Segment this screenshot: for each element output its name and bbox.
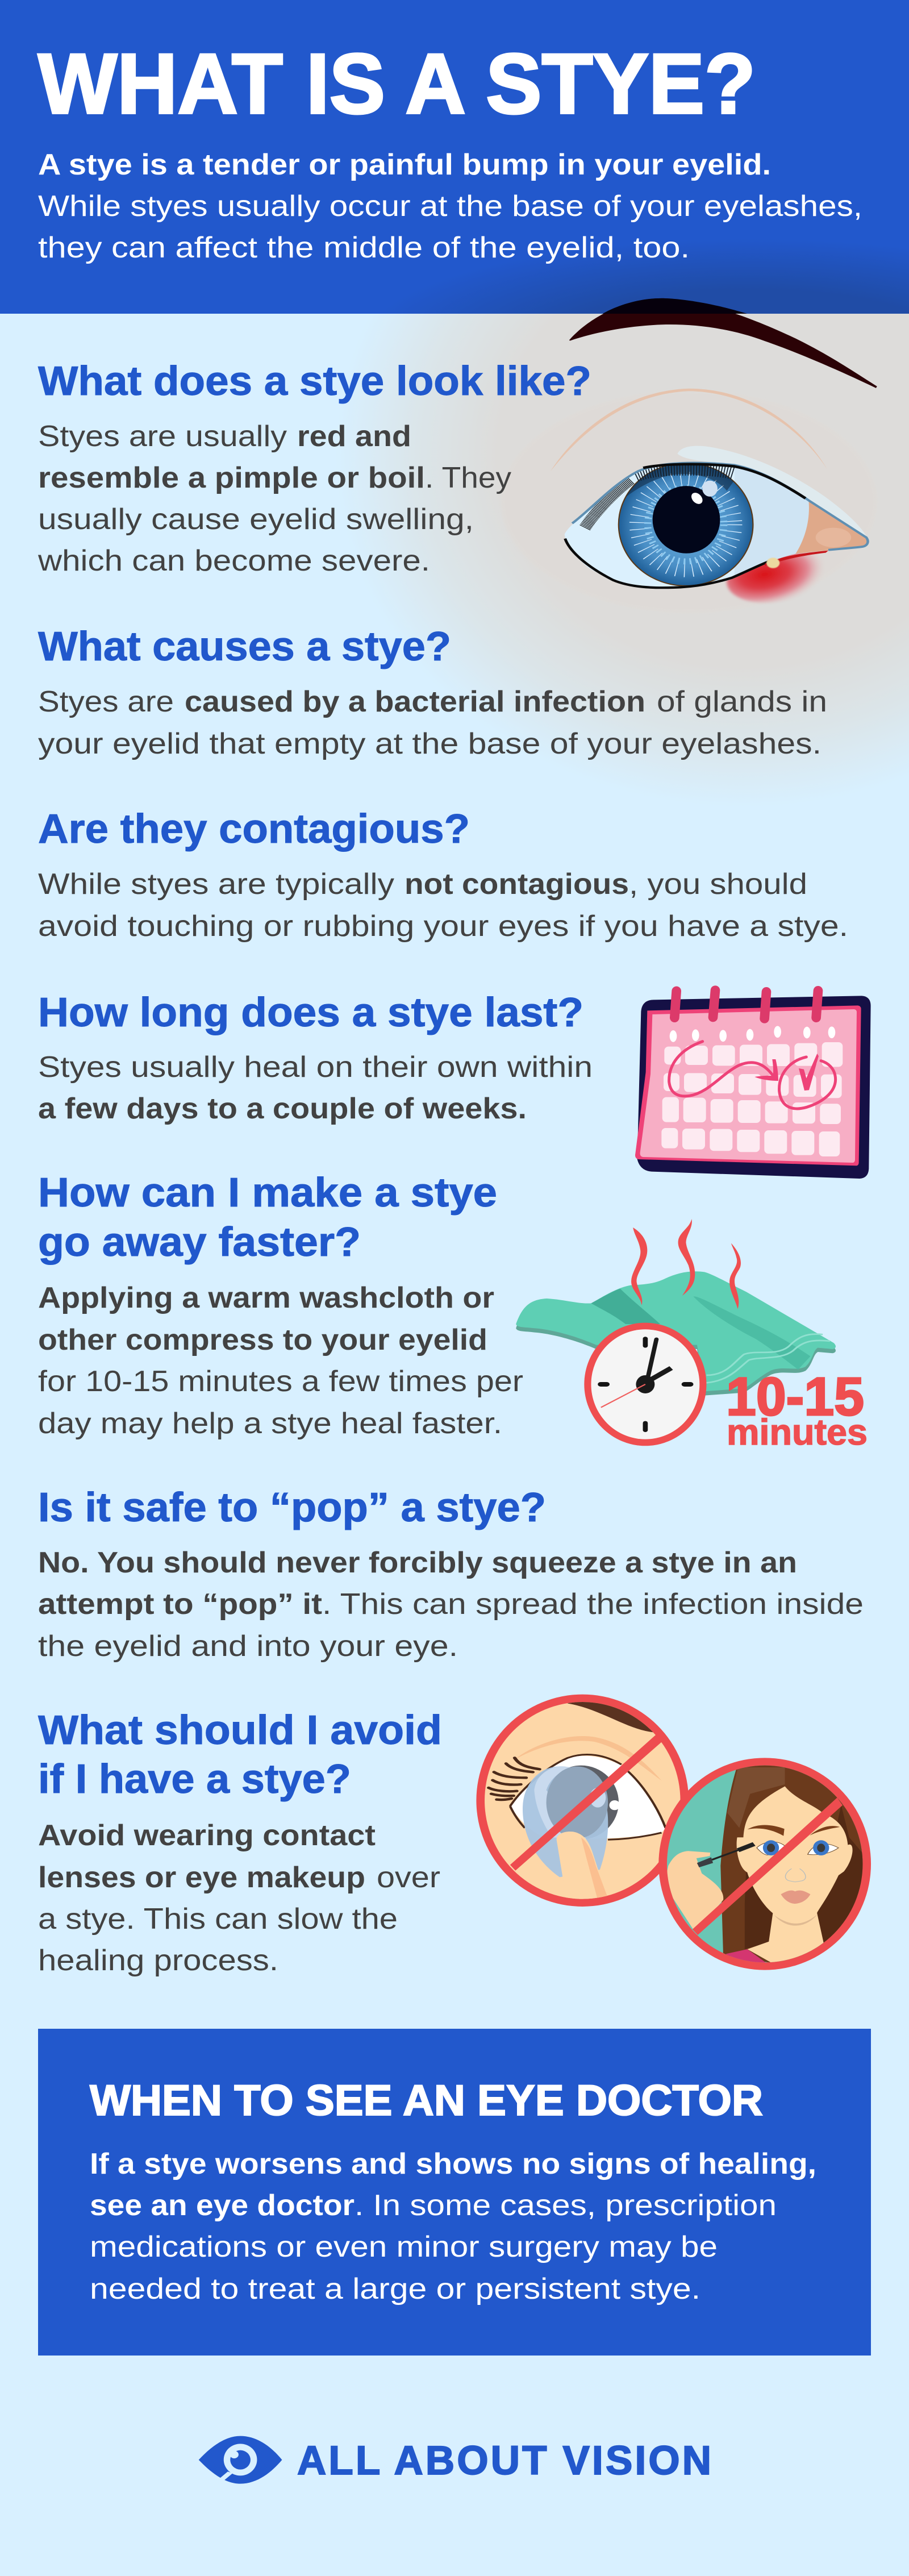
body text: for 10-15 minutes a few times per bbox=[38, 1365, 523, 1398]
body text bbox=[38, 1051, 593, 1125]
weekday markers bbox=[670, 1026, 835, 1042]
date cells bbox=[661, 1042, 843, 1156]
heading: How can I make a stye bbox=[38, 1170, 497, 1216]
steam bbox=[631, 1219, 741, 1309]
logo wordmark: ALL ABOUT VISION bbox=[297, 2438, 711, 2483]
section: what does a stye look like bbox=[37, 359, 591, 577]
heading: How long does a stye last? bbox=[38, 990, 583, 1035]
heading: if I have a stye? bbox=[38, 1757, 351, 1802]
heading bbox=[38, 1708, 442, 1802]
upper lid line bbox=[572, 463, 868, 550]
woman: face bbox=[737, 1786, 853, 1972]
upper lid highlight bbox=[677, 446, 868, 539]
woman: eyes bbox=[757, 1840, 839, 1855]
heading: Are they contagious? bbox=[38, 806, 470, 852]
woman: hair bbox=[720, 1765, 862, 1963]
body text bbox=[38, 1819, 440, 1977]
body text: which can become severe. bbox=[37, 544, 430, 577]
calendar page bbox=[635, 1005, 861, 1166]
calendar backing bbox=[637, 996, 871, 1179]
body text bbox=[37, 420, 511, 577]
header panel bbox=[0, 0, 909, 314]
label: 10-15 minutes: minutes bbox=[727, 1412, 868, 1453]
header intro text bbox=[38, 148, 862, 264]
heading: What causes a stye? bbox=[38, 624, 451, 669]
heading: What should I avoid bbox=[38, 1708, 442, 1753]
callout body bbox=[90, 2148, 816, 2306]
woman: brows bbox=[747, 1825, 840, 1836]
washcloth bbox=[516, 1271, 836, 1396]
arrow scribble bbox=[669, 1042, 778, 1096]
body text: a stye. This can slow the bbox=[38, 1903, 398, 1936]
pupil bbox=[653, 486, 720, 554]
eyelid crease bbox=[551, 389, 827, 471]
body text bbox=[38, 1546, 864, 1663]
body text: other compress to your eyelid bbox=[38, 1324, 487, 1356]
heading bbox=[38, 1170, 497, 1265]
circled check mark bbox=[779, 1054, 836, 1109]
body text: red and bbox=[297, 420, 411, 453]
icon: warm compress and clock bbox=[516, 1219, 836, 1446]
body text: healing process. bbox=[38, 1944, 278, 1977]
body text: not contagious bbox=[405, 868, 629, 901]
icon: no contact lenses and no eye makeup bbox=[476, 1695, 873, 1972]
callout: when to see an eye doctor bbox=[38, 2029, 871, 2356]
heading: Is it safe to “pop” a stye? bbox=[38, 1485, 546, 1530]
lower lid line bbox=[565, 539, 773, 588]
binder rings bbox=[674, 991, 818, 1018]
body text: lenses or eye makeup bbox=[38, 1861, 365, 1894]
body text: Avoid wearing contact bbox=[38, 1819, 376, 1852]
section: what should I avoid bbox=[38, 1708, 442, 1977]
gray skin backdrop behind eye bbox=[365, 314, 909, 781]
section: what causes a stye bbox=[38, 624, 827, 760]
body text: of glands in bbox=[657, 685, 827, 718]
body text: Styes usually heal on their own within bbox=[38, 1051, 593, 1084]
callout body: If a stye worsens and shows no signs of healing, bbox=[90, 2148, 816, 2180]
iris bbox=[619, 463, 753, 586]
header intro text: While styes usually occur at the base of your eyelashes, bbox=[38, 190, 862, 223]
body text: Styes are bbox=[38, 685, 174, 718]
eyebrow bbox=[569, 298, 877, 388]
body text: Applying a warm washcloth or bbox=[38, 1281, 494, 1314]
stye bump bbox=[765, 551, 828, 568]
icon: stye eye illustration bbox=[551, 298, 877, 604]
header intro text: A stye is a tender or painful bump in your eyelid. bbox=[38, 148, 771, 181]
stye swelling bbox=[719, 538, 836, 611]
body text: a few days to a couple of weeks. bbox=[38, 1092, 527, 1125]
label: 10-15 minutes bbox=[726, 1367, 868, 1453]
body text bbox=[38, 685, 827, 760]
section: are they contagious bbox=[38, 806, 848, 943]
body text: resemble a pimple or boil bbox=[38, 461, 425, 494]
body text: your eyelid that empty at the base of your eyelashes. bbox=[38, 727, 822, 760]
body text: avoid touching or rubbing your eyes if you have a stye. bbox=[38, 910, 848, 943]
eyelashes bbox=[489, 1758, 540, 1800]
woman: nose and lips bbox=[785, 1868, 806, 1882]
body text: caused by a bacterial infection bbox=[185, 685, 645, 718]
callout heading: WHEN TO SEE AN EYE DOCTOR bbox=[90, 2076, 763, 2125]
header intro text: they can affect the middle of the eyelid, too. bbox=[38, 231, 690, 264]
logo: All About Vision bbox=[199, 2436, 711, 2484]
section: how can I make a stye go away faster bbox=[38, 1170, 523, 1440]
callout body: needed to treat a large or persistent stye. bbox=[90, 2273, 700, 2306]
body text: . This can spread the infection inside bbox=[322, 1588, 864, 1621]
eyeball bbox=[565, 458, 872, 589]
section: is it safe to pop a stye bbox=[38, 1485, 864, 1663]
body text: day may help a stye heal faster. bbox=[38, 1407, 502, 1440]
body text: the eyelid and into your eye. bbox=[38, 1630, 458, 1663]
no-sign: contact lens bbox=[476, 1695, 691, 1907]
body text: . They bbox=[425, 461, 511, 494]
clock bbox=[584, 1323, 706, 1446]
icon: calendar bbox=[635, 991, 871, 1179]
heading: go away faster? bbox=[38, 1220, 361, 1265]
no-sign: eye makeup bbox=[658, 1758, 873, 1972]
body text bbox=[38, 868, 848, 943]
section: how long does a stye last bbox=[38, 990, 593, 1125]
finger bbox=[557, 1832, 608, 1900]
title: WHAT IS A STYE? bbox=[38, 36, 756, 131]
logo eye icon bbox=[199, 2436, 282, 2484]
body text: , you should bbox=[629, 868, 807, 901]
body text bbox=[38, 1281, 523, 1440]
label: 10-15 minutes: 10-15 bbox=[726, 1367, 864, 1427]
body text: attempt to “pop” it bbox=[38, 1588, 322, 1621]
hand and mascara bbox=[664, 1844, 754, 1930]
eyelashes bbox=[585, 480, 631, 528]
body text: over bbox=[377, 1861, 440, 1894]
body text: usually cause eyelid swelling, bbox=[38, 503, 474, 536]
callout body: see an eye doctor bbox=[90, 2189, 355, 2222]
body text: No. You should never forcibly squeeze a stye in an bbox=[38, 1546, 797, 1579]
contact lens bbox=[523, 1766, 608, 1877]
callout body: medications or even minor surgery may be bbox=[90, 2230, 718, 2263]
body text: While styes are typically bbox=[38, 868, 394, 901]
callout body: . In some cases, prescription bbox=[355, 2189, 777, 2222]
heading: What does a stye look like? bbox=[38, 359, 591, 404]
body text: Styes are usually bbox=[38, 420, 287, 453]
